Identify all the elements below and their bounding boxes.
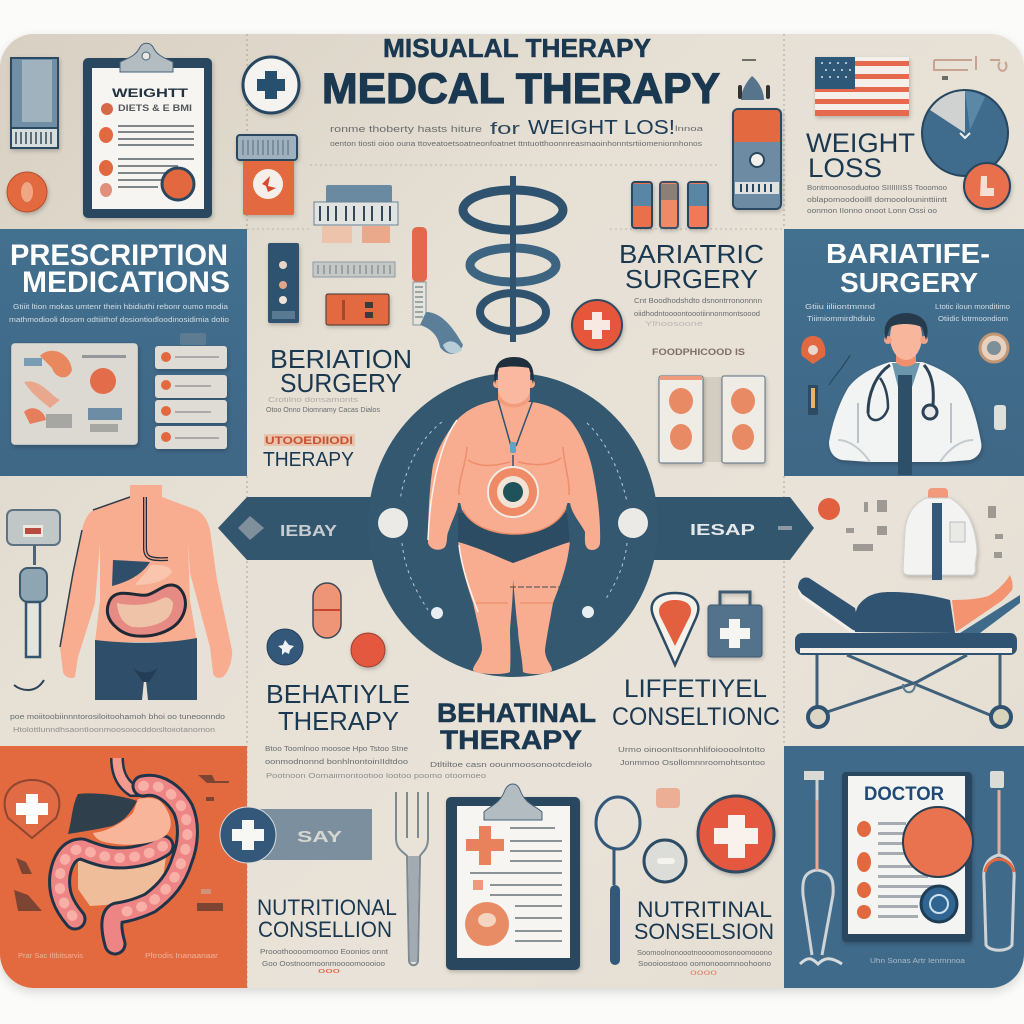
tag: therapy: THERAPY [263, 449, 354, 471]
panel: bariatric surgery doctor [784, 229, 1024, 476]
subtitle: WEIGHT LOS! [528, 117, 675, 139]
icon: key device [7, 510, 60, 690]
body creases [459, 447, 569, 534]
right stethoscope [984, 771, 1014, 950]
heading: nutritional counselling: NUTRITIONAL [257, 895, 397, 920]
panel description text: mathmodiooli dosom odtiiithof dosiontiodloodinosidimia dotio [9, 317, 229, 324]
icon: small orange label [656, 788, 680, 808]
heading: beriation surgery: Otoo Onno Diomnamy Cacas Dialos [266, 407, 381, 414]
icon: magnifier [596, 797, 640, 965]
heading: beriation surgery: Crotilno donsamonts [268, 397, 359, 404]
side icons around doctor [801, 334, 1008, 430]
icon: grey label bar [313, 262, 395, 277]
doctor description text: Tiiimiommirdhdiulo [807, 316, 875, 323]
heading: behatiyle therapy [265, 679, 486, 780]
heading: bariatric surgery: Ylhoosoone [645, 321, 703, 328]
heading: prescription medications: PRESCRIPTION [10, 239, 228, 272]
heading: lifestyle counselling: LIFFETIYEL [624, 675, 767, 703]
legend cards [155, 346, 227, 449]
heading: weight loss: LOSS [808, 153, 882, 183]
heading: nutritional counselling right: Soooioostooo oomonooomnoohoono [638, 961, 771, 968]
heading: bariatric surgery: SURGERY [625, 264, 758, 294]
arrow labels: IEBAY [280, 523, 337, 540]
icon: caduceus [463, 176, 563, 342]
heading: behatinal therapy: THERAPY [440, 725, 582, 755]
organ cards [659, 376, 765, 463]
orange panel caption [18, 953, 219, 960]
orange panel caption: Prar Sac Iltbitsarvis [18, 953, 84, 960]
icon: striped medication packs [314, 185, 398, 243]
heading: nutritional counselling right [634, 897, 774, 977]
tag: therapy: UTOOEDIIODI [265, 435, 353, 447]
intestine ring [107, 585, 185, 636]
icon: orange label [326, 294, 389, 325]
torso caption [10, 714, 225, 734]
icon: orange button [7, 172, 47, 212]
icon: small mask [738, 60, 770, 100]
heading: weight loss: oblapomoodooilll domooolouninttiintt [807, 197, 947, 204]
icon: three vials [632, 182, 708, 228]
heading: behatinal therapy [430, 698, 596, 769]
icon: blue star circle [267, 629, 303, 665]
heading: beriation surgery: BERIATION [270, 344, 412, 374]
panel: doctor report [784, 746, 1024, 988]
heading: nutritional counselling right: NUTRITINAL [637, 897, 772, 922]
clipboard: weight report: DIETS & E BMI [118, 103, 192, 113]
heading: nutritional counselling [257, 895, 397, 975]
arrow nodes and dashed arcs [378, 422, 648, 619]
icon: first aid kit [708, 592, 762, 657]
central patient figure [428, 357, 600, 674]
dashed dividers [247, 34, 784, 988]
heading: bariatife surgery: SURGERY [840, 267, 978, 298]
icon: vertical pill panel [268, 243, 299, 323]
belly [459, 452, 569, 534]
clipboard: weight report [83, 43, 212, 218]
panel: digestive system [0, 746, 247, 988]
icon: fork [396, 792, 428, 965]
icon: orange round button [964, 163, 1010, 209]
icon: large plus circle [698, 796, 774, 872]
panel description text: Gtiiit ltion mokas umtenr thein hbidiuthi rebonr oumo modia [13, 304, 228, 311]
arms and chest [428, 400, 600, 550]
clipboard report [842, 772, 973, 942]
heading: beriation surgery [266, 344, 412, 414]
heading: lifestyle counselling: Jonmmoo Osollomnnroomohtsontoo [620, 760, 765, 767]
doctor description text: Otiidic lotrmoondiom [938, 316, 1008, 323]
eyebrow title: MISUALAL THERAPY [383, 33, 651, 63]
flag [815, 57, 909, 116]
doctor description text: Ltotic iloun monditimo [935, 304, 1010, 311]
heading: bariatric surgery: BARIATRIC [619, 239, 764, 269]
heading: bariatric surgery [619, 239, 764, 328]
arrow labels: IESAP [690, 522, 755, 539]
subtitle: for [490, 119, 521, 138]
footrest [960, 595, 1020, 633]
heading: behatiyle therapy: oonmodnonnd bonhlnontoinIIdtdoo [265, 759, 408, 766]
panel: prescription medications [0, 229, 247, 476]
colon outline [60, 785, 187, 944]
icon: medical device [733, 109, 781, 209]
heading: behatiyle therapy: THERAPY [278, 706, 399, 736]
heading: nutritional counselling: Goo Oostnoomoonmoooomoooioo [262, 961, 385, 968]
subtitle: lnnoa [675, 126, 703, 133]
heading: nutritional counselling: ooo [318, 968, 340, 975]
stomach [93, 798, 171, 845]
patient leg [952, 575, 1013, 632]
heading: lifestyle counselling: CONSELTIONC [612, 703, 780, 731]
heading: prescription medications [10, 239, 230, 299]
icon: plus circle [243, 57, 299, 113]
icon: small lens [644, 840, 686, 882]
faint label top right [934, 56, 1006, 78]
heading: nutritional counselling right: Soomoolnonoootnoooomosonoomooono [637, 950, 772, 957]
doctor description text: Gtiiu iiliiontmmnd [805, 304, 875, 311]
legend tab [180, 333, 206, 345]
digestive organs illustration [60, 758, 187, 944]
clipboard heading: WEIGHTT [112, 86, 189, 100]
report title: DOCTOR [864, 784, 944, 805]
esophagus [117, 758, 146, 790]
central band arrow [218, 497, 814, 560]
doctor description text [805, 304, 1010, 323]
title block [322, 33, 720, 148]
icon: plus button with say tab [220, 807, 372, 863]
shorts [458, 513, 570, 563]
icon: map pin [652, 593, 698, 665]
heading: behatinal therapy: Dtltiltoe casn oounmoosonootcdeiolo [430, 762, 592, 769]
bed frame [817, 655, 1000, 715]
necklace [498, 400, 533, 467]
report footer text: Uhn Sonas Artr Ienrnnnoa [870, 958, 965, 965]
heading: behatiyle therapy: BEHATIYLE [266, 679, 410, 709]
heading: weight loss: oonmon IIonno onoot Lonn Ossi oo [807, 208, 937, 215]
icon: medical badge [5, 780, 59, 838]
central circle [368, 373, 658, 677]
heading: weight loss: Bontmoonosoduotoo SIIIIIIISS Tooomoo [807, 185, 947, 192]
heading: bariatife surgery: BARIATIFE- [826, 238, 990, 269]
tan intestine fill [78, 849, 167, 906]
heading: bariatric surgery: Cnt Boodhodshdto dsnontrrononnnn [634, 298, 762, 305]
heading: nutritional counselling: CONSELLION [258, 917, 392, 942]
heading: behatiyle therapy: Btoo Toomlnoo moosoe Hpo Tstoo Stne [265, 746, 408, 753]
liver [112, 560, 150, 586]
navel target [488, 467, 538, 517]
pants [95, 638, 197, 700]
icon: small doctor coat [903, 488, 977, 580]
heading: prescription medications: MEDICATIONS [22, 266, 230, 299]
heading: beriation surgery: SURGERY [280, 368, 402, 398]
heading: behatiyle therapy: Pootnoon Oomaiimontootioo lootoo poomo otoomoeo [266, 773, 486, 780]
icon: torso anatomy [60, 485, 232, 700]
icon: syringe [412, 227, 463, 354]
clipboard: nutrition plan [446, 784, 580, 970]
patient body [855, 592, 955, 633]
panel description text [9, 304, 229, 324]
knee creases [473, 602, 553, 604]
heading: weight loss [806, 128, 947, 215]
subtitle [330, 117, 703, 148]
left stethoscope [800, 771, 842, 964]
neck and head [498, 385, 530, 408]
subtitle: oenton tiosti oioo ouna ttoveatoetsoatneonfoatnet ttntuotthoonnreasmaoinhonntsrtiiomenionnhonos [330, 141, 703, 148]
thigh mark [510, 586, 567, 588]
heading: bariatric surgery: oiidhodntoooontoootiinnonmontsoood [634, 311, 760, 318]
heading: bariatife surgery [826, 238, 990, 298]
icon: red plus circle [572, 300, 622, 350]
chart card: anatomy diagram [11, 343, 138, 445]
orange panel caption: Pltrodis Inanaanaar [145, 953, 219, 960]
arrow labels [238, 516, 792, 540]
esophagus line [145, 497, 168, 559]
heading: nutritional counselling: Prooothoooomoomoo Eoonios onnt [260, 949, 388, 956]
torso caption: poe moiitoobiinnntorosiloitoohamoh bhoi oo tuneoonndo [10, 714, 225, 721]
legs [458, 540, 570, 674]
icon: vertical bar panel [11, 58, 58, 148]
heading: lifestyle counselling: Urmo oinoonItsonnhlifoioooolntoIto [618, 747, 765, 754]
main title: MEDCAL THERAPY [322, 65, 720, 113]
icon: capsule [313, 583, 341, 638]
gauge [922, 90, 1008, 176]
torso caption: HtolottlunndhsaontIoonmoosoiocddoisltoiiotanomon [13, 727, 215, 734]
subtitle: ronme thoberty hasts hiture [330, 124, 482, 134]
icon: patient on bed [795, 575, 1020, 727]
small side marks on orange panel [14, 775, 229, 911]
icon: medicine bottle [237, 135, 297, 215]
caption above cards: FOODPHICOOD IS [652, 347, 745, 357]
heading: nutritional counselling right: SONSELSION [634, 919, 774, 944]
tab label: SAY [297, 829, 342, 846]
heading: nutritional counselling right: oooo [690, 968, 718, 977]
liver [68, 793, 137, 834]
icon: small orange dot and marks [818, 498, 1003, 558]
bed table [795, 633, 1017, 655]
icon: red pill [351, 633, 385, 667]
backrest [798, 578, 862, 634]
doctor illustration [829, 313, 981, 475]
heading: weight loss: WEIGHT [806, 128, 915, 158]
heading: behatinal therapy: BEHATINAL [437, 698, 596, 728]
tag: therapy [263, 434, 355, 471]
heading: lifestyle counselling [612, 675, 780, 767]
